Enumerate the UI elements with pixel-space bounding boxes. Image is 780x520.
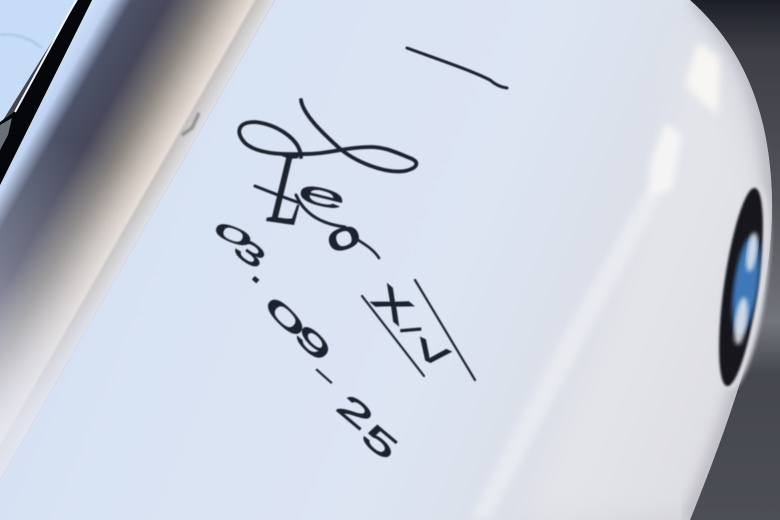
date: 5 [355,417,405,467]
window reflections [470,42,720,520]
signature name: Leo [255,127,379,261]
date: 9 [287,317,339,369]
date: 0 [210,216,256,254]
date: 0 [258,290,312,344]
papal numeral: XIV: I [393,324,427,336]
signature name: Leo: o [321,211,365,261]
date [210,216,405,467]
date: 2 [330,387,380,437]
date: 3 [228,231,272,275]
BMW emblem [708,181,780,393]
papal numeral: XIV: X [365,277,419,333]
handwritten signature and date [210,48,507,467]
date: . [244,252,280,292]
top pen stroke [407,48,507,88]
blue quarters [727,234,765,336]
white quarters [744,231,760,273]
body edge shading [690,0,772,520]
date: - [307,357,343,393]
chrome strip [0,0,275,480]
signature name: Leo: L [263,127,312,249]
strip mark [182,113,199,135]
glass and black trim [0,0,92,185]
papal numeral: XIV [362,277,475,380]
signature name: Leo: e [294,172,350,218]
signature flourish [239,100,416,171]
papal numeral: XIV: V [410,332,455,374]
paint sheen [551,104,756,520]
